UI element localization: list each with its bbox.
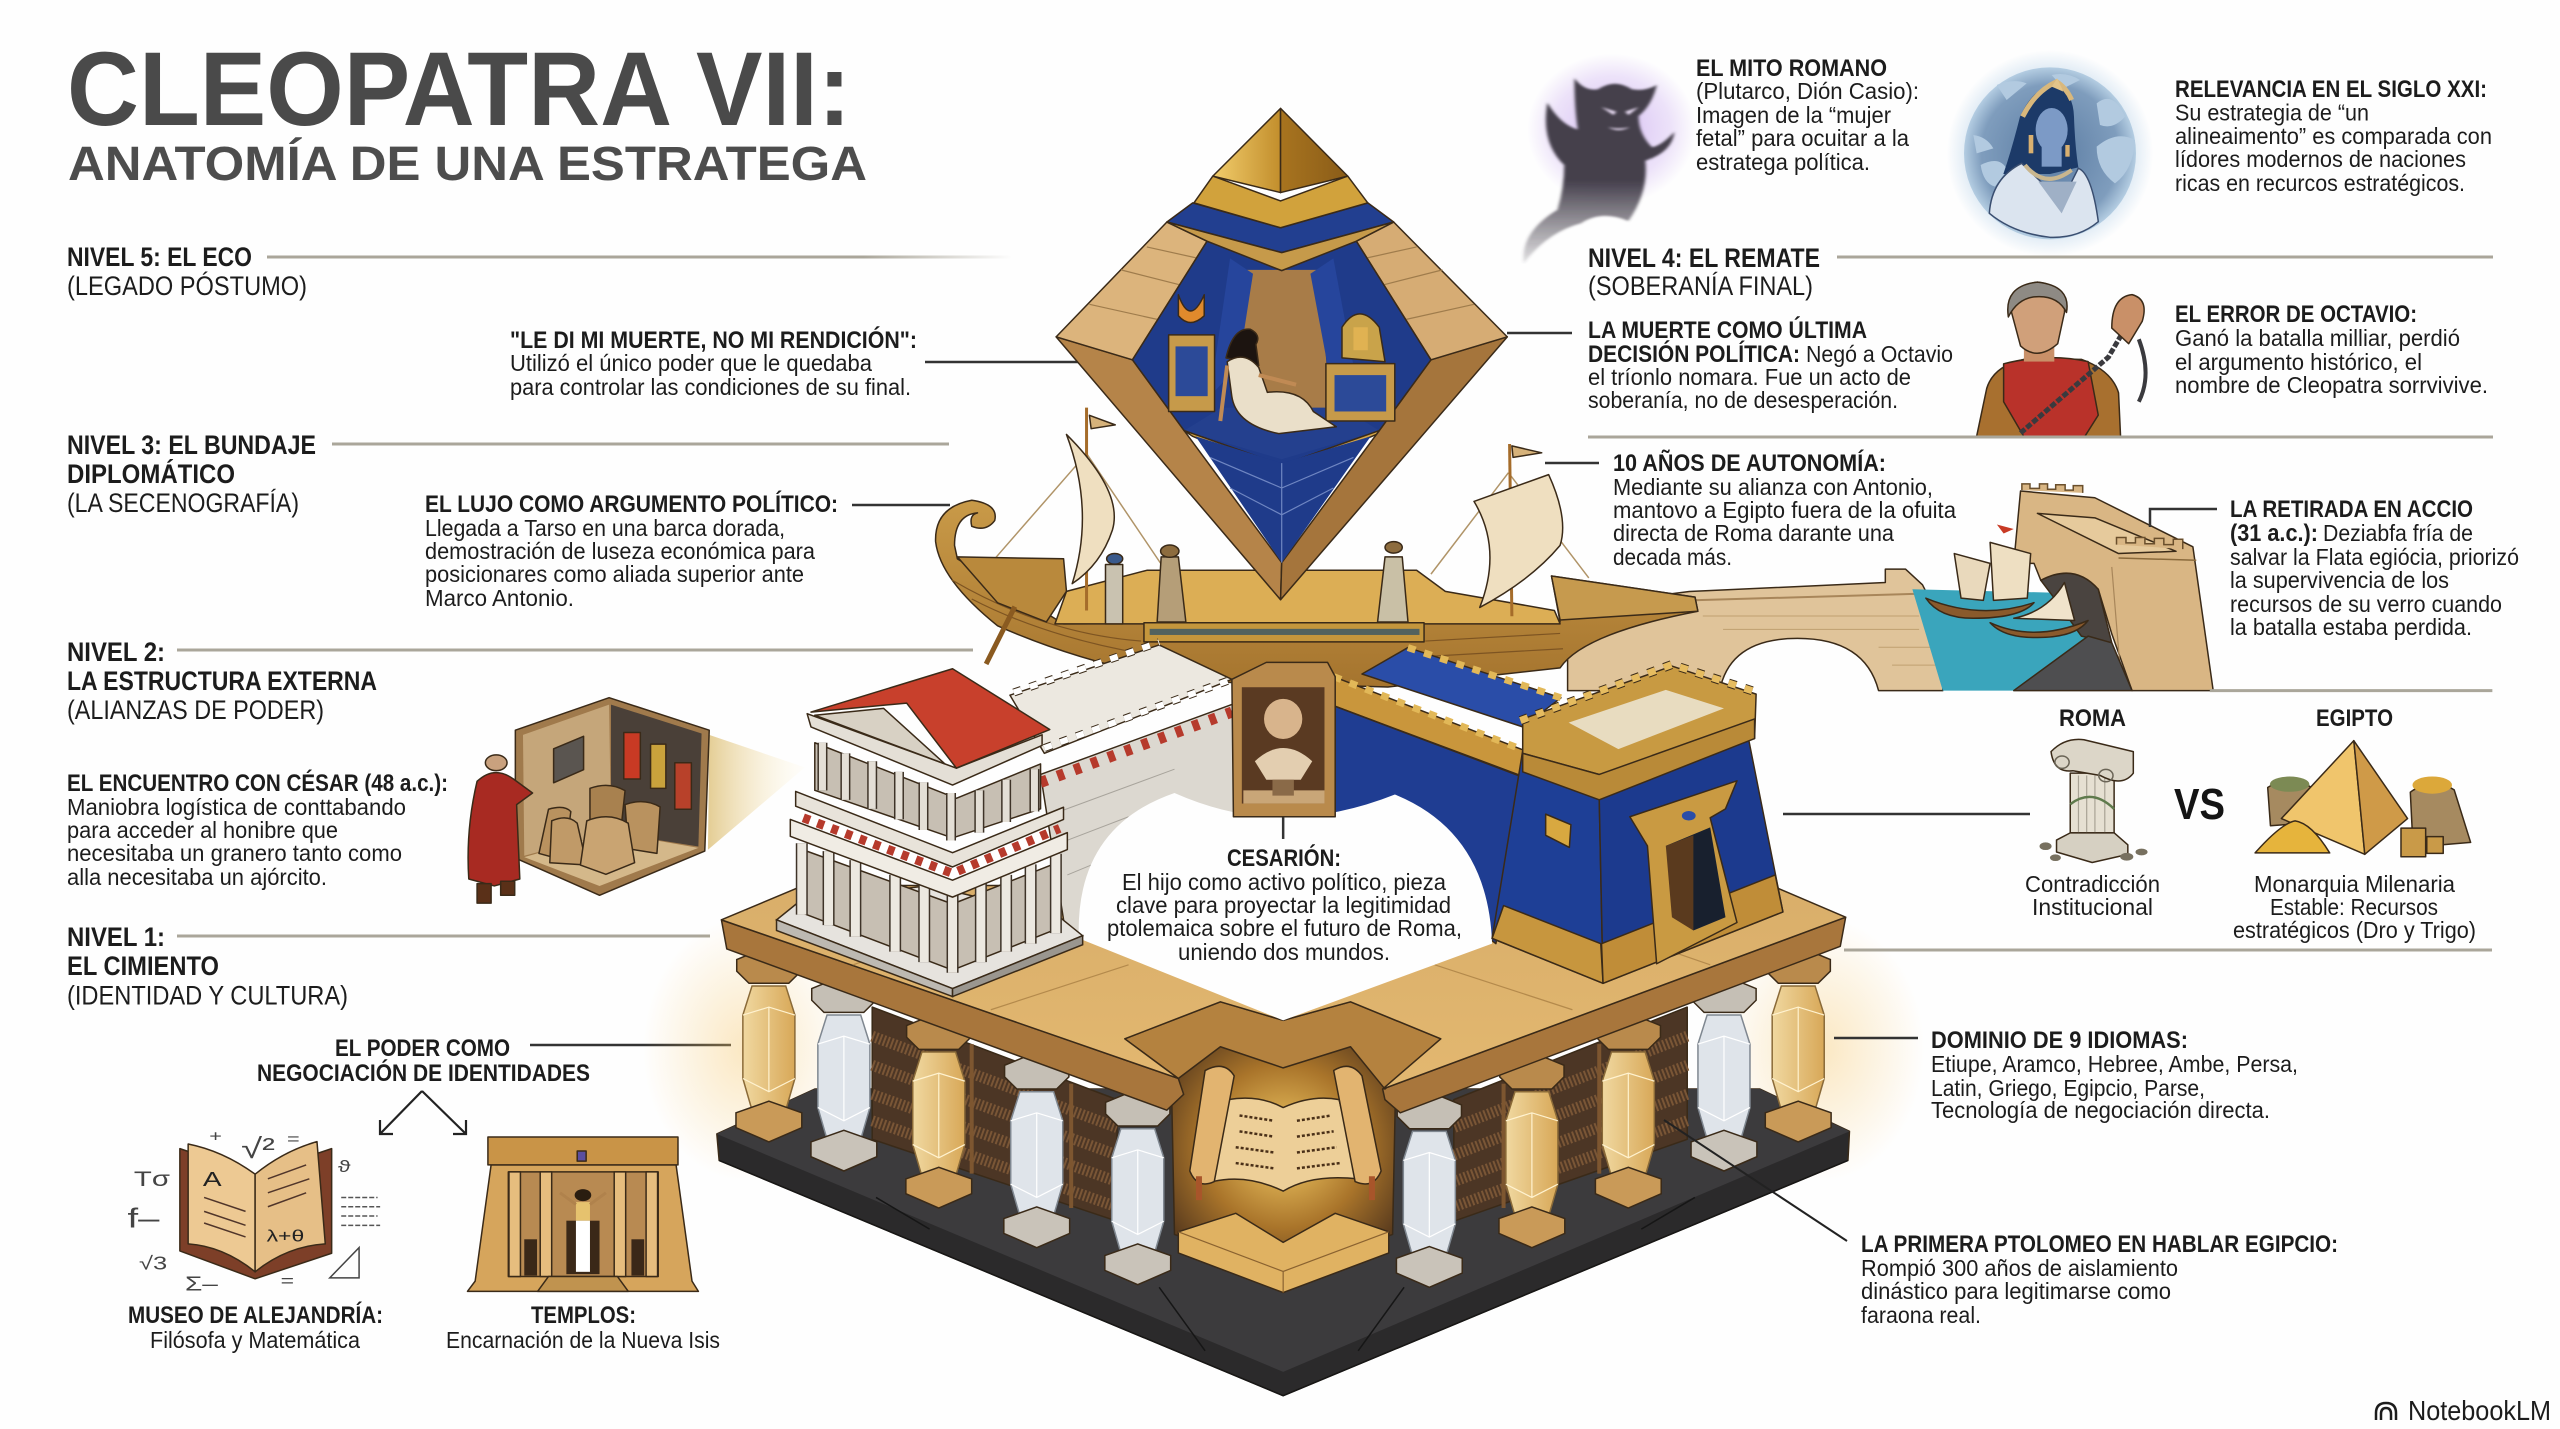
leader: roma vs egipto <box>1783 813 2030 815</box>
text: la primera ptolomeo <box>1664 1120 2338 1328</box>
text: relevancia en el siglo xxi: RELEVANCIA EN EL SIGLO XXI: <box>2175 76 2487 103</box>
text: cesarion: ptolemaica sobre el futuro de Roma, <box>1107 915 1462 941</box>
text: la muerte como ultima: Negó a Octavio <box>1806 341 1953 367</box>
comparison: egipto: estratégicos (Dro y Trigo) <box>2233 917 2476 943</box>
text: 10 años de autonomia: decada más. <box>1613 544 1732 570</box>
text: dominio de 9 idiomas: DOMINIO DE 9 IDIOMAS: <box>1931 1027 2188 1054</box>
white heart panel <box>1079 793 1492 1020</box>
text: el encuentro con cesar <box>67 769 448 890</box>
comparison: roma <box>2025 705 2160 920</box>
text: la retirada en accio: Deziabfa fría de <box>2323 520 2473 546</box>
text: museo and templos captions <box>128 1301 720 1353</box>
text: dominio de 9 idiomas: Tecnología de negociación directa. <box>1931 1097 2270 1123</box>
heading: nivel 3: NIVEL 3: EL BUNDAJE <box>67 430 316 460</box>
text: relevancia en el siglo xxi: ricas en recurcos estratégicos. <box>2175 170 2465 196</box>
text: le di mi muerte: Utilizó el único poder que le quedaba <box>510 350 872 376</box>
text: el lujo: posicionares como aliada superior ante <box>425 561 804 587</box>
roman temple <box>777 669 1083 997</box>
text: la retirada en accio: recursos de su verro cuando <box>2230 591 2502 617</box>
heading: nivel 2: (ALIANZAS DE PODER) <box>67 695 324 725</box>
heading: nivel 4 <box>1588 243 2493 301</box>
heading: nivel 4: (SOBERANÍA FINAL) <box>1588 271 1813 301</box>
text: museo and templos captions: TEMPLOS: <box>531 1302 636 1329</box>
heading: nivel 3: DIPLOMÁTICO <box>67 458 235 489</box>
side glow <box>643 917 1924 1182</box>
text: el encuentro con cesar: alla necesitaba un ajórcito. <box>67 864 327 890</box>
text: el lujo: Llegada a Tarso en una barca dorada, <box>425 515 785 541</box>
alcove with glowing scroll <box>1171 1044 1396 1293</box>
text: la retirada en accio: (31 a.c.): <box>2230 520 2318 547</box>
label: vs: VS <box>2174 780 2225 829</box>
text: el mito romano: EL MITO ROMANO <box>1696 55 1887 82</box>
title: ANATOMÍA DE UNA ESTRATEGA <box>68 137 867 191</box>
text: el error de octavio: Ganó la batalla milliar, perdió <box>2175 325 2460 351</box>
icon: open book with formulas: Tσ <box>134 1167 170 1191</box>
heading: nivel 2: LA ESTRUCTURA EXTERNA <box>67 666 377 696</box>
text: le di mi muerte <box>510 326 1137 400</box>
text: 10 años de autonomia: directa de Roma darante una <box>1613 520 1894 546</box>
text: cesarion: CESARIÓN: <box>1227 844 1341 872</box>
icon: open book with formulas: A <box>203 1168 222 1191</box>
comparison: roma: Institucional <box>2032 894 2153 920</box>
text: el error de octavio: el argumento histórico, el <box>2175 349 2422 375</box>
heading: nivel 1: (IDENTIDAD Y CULTURA) <box>67 980 348 1010</box>
icon: open book with formulas: = <box>287 1131 300 1148</box>
heading: nivel 1 <box>67 922 710 1010</box>
text: la retirada en accio: salvar la Flata egiócia, priorizó <box>2230 544 2519 570</box>
ship: golden barge <box>936 408 1698 687</box>
text: el lujo: demostración de luseza económica para <box>425 538 815 564</box>
heading: nivel 5: (LEGADO PÓSTUMO) <box>67 270 307 301</box>
text: el poder como negociacion <box>257 1035 731 1087</box>
icon: octavian with broken chain <box>1977 282 2146 437</box>
text: la primera ptolomeo: faraona real. <box>1861 1302 1981 1328</box>
text: 10 años de autonomia: 10 AÑOS DE AUTONOMÍA: <box>1613 449 1886 477</box>
comparison: roma: ROMA <box>2059 705 2126 732</box>
central monument: isometric tiers <box>643 642 1924 1396</box>
icon: pyramid with grain and coins <box>2255 741 2471 857</box>
bookshelves <box>872 1007 1687 1221</box>
icon: open book with formulas: √3 <box>139 1253 167 1274</box>
icon: caesar and grain cutaway <box>468 698 805 903</box>
text: museo and templos captions: Filósofa y Matemática <box>150 1327 360 1353</box>
icon: cleopatra globe portrait <box>1947 50 2153 257</box>
icon: open book with formulas: √² <box>241 1134 275 1165</box>
text: la primera ptolomeo: LA PRIMERA PTOLOMEO EN HABLAR EGIPCIO: <box>1861 1231 2338 1258</box>
text: el encuentro con cesar: para acceder al honibre que <box>67 817 338 843</box>
icon: open book with formulas <box>128 1128 380 1295</box>
stone and lapis arches <box>1010 642 1561 944</box>
text: le di mi muerte: para controlar las condiciones de su final. <box>510 374 911 400</box>
icon: open book with formulas: ϑ <box>338 1158 351 1176</box>
bridge and fortress of actium <box>1568 484 2492 691</box>
text: relevancia en el siglo xxi: lídores modernos de naciones <box>2175 146 2466 172</box>
lapis pylon tower <box>1492 665 1783 983</box>
comparison: roma: Contradicción <box>2025 871 2160 897</box>
text: la muerte como ultima: LA MUERTE COMO ÚLTIMA <box>1588 316 1867 344</box>
text: la retirada en accio: la batalla estaba perdida. <box>2230 614 2472 640</box>
text: le di mi muerte: "LE DI MI MUERTE, NO MI RENDICIÓN": <box>510 326 917 354</box>
heading: nivel 5: NIVEL 5: EL ECO <box>67 242 252 272</box>
text: cesarion: El hijo como activo político, pieza <box>1122 869 1446 895</box>
heading: nivel 2: NIVEL 2: <box>67 637 165 667</box>
text: el lujo <box>425 490 950 611</box>
text: dominio de 9 idiomas: Latin, Griego, Egipcio, Parse, <box>1931 1075 2205 1101</box>
diamond: nivel 4 and 5 capstone <box>1056 108 1507 600</box>
text: el mito romano: estratega política. <box>1696 149 1870 175</box>
icon: open book with formulas: Σ– <box>185 1273 218 1295</box>
text: el mito romano: fetal” para ocuitar a la <box>1696 125 1909 151</box>
text: relevancia en el siglo xxi: alineaimento” es comparada con <box>2175 123 2492 149</box>
text: 10 años de autonomia: Mediante su alianza con Antonio, <box>1613 474 1933 500</box>
heading: nivel 4: NIVEL 4: EL REMATE <box>1588 243 1820 273</box>
text: la muerte como ultima <box>1507 316 1953 413</box>
text: el lujo: EL LUJO COMO ARGUMENTO POLÍTICO: <box>425 490 838 518</box>
comparison: egipto: Monarquia Milenaria <box>2254 871 2455 897</box>
icon: broken ionic column <box>2040 739 2148 862</box>
heading: nivel 3 <box>67 430 949 518</box>
text: la muerte como ultima: el tríonlo nomara. Fue un acto de <box>1588 364 1911 390</box>
text: la primera ptolomeo: Rompió 300 años de aislamiento <box>1861 1255 2178 1281</box>
text: el mito romano: Imagen de la “mujer <box>1696 102 1891 128</box>
heading: nivel 1: NIVEL 1: <box>67 922 165 952</box>
icon: open book with formulas: f– <box>128 1204 160 1234</box>
title: CLEOPATRA VII: <box>67 31 851 148</box>
text: el error de octavio <box>2175 301 2488 398</box>
comparison: egipto <box>2233 705 2476 943</box>
text: la muerte como ultima: soberanía, no de desesperación. <box>1588 387 1898 413</box>
upper deck and fascia <box>721 885 1846 1113</box>
text: la retirada en accio: la supervivencia de los <box>2230 567 2449 593</box>
comparison: egipto: EGIPTO <box>2316 705 2393 732</box>
heading: nivel 1: EL CIMIENTO <box>67 951 219 981</box>
text: 10 años de autonomia: mantovo a Egipto fuera de la ofuita <box>1613 497 1956 523</box>
bust niche of cesarion <box>1232 662 1335 839</box>
text: la muerte como ultima: DECISIÓN POLÍTICA: <box>1588 340 1800 368</box>
text: cesarion <box>1107 844 1462 965</box>
text: museo and templos captions: MUSEO DE ALEJANDRÍA: <box>128 1301 383 1329</box>
text: dominio de 9 idiomas: Etiupe, Aramco, Hebree, Ambe, Persa, <box>1931 1051 2298 1077</box>
text: el poder como negociacion: EL PODER COMO <box>335 1035 510 1062</box>
text: la retirada en accio <box>2150 496 2519 640</box>
text: el encuentro con cesar: EL ENCUENTRO CON CÉSAR (48 a.c.): <box>67 769 448 797</box>
text: cesarion: uniendo dos mundos. <box>1178 939 1390 965</box>
text: la primera ptolomeo: dinástico para legitimarse como <box>1861 1278 2171 1304</box>
heading: nivel 2 <box>67 637 973 725</box>
icon: open book with formulas: λ+θ <box>267 1227 304 1246</box>
icon: open book with formulas: + <box>209 1128 222 1146</box>
text: el poder como negociacion: NEGOCIACIÓN DE IDENTIDADES <box>257 1059 590 1087</box>
text: el error de octavio: nombre de Cleopatra sorrvivive. <box>2175 372 2488 398</box>
text: la retirada en accio: LA RETIRADA EN ACCIO <box>2230 496 2473 523</box>
dark base platform <box>717 1089 1849 1396</box>
crystal columns <box>736 946 1831 1287</box>
text: relevancia en el siglo xxi <box>2175 76 2492 196</box>
heading: nivel 5 <box>67 242 1012 301</box>
text: el lujo: Marco Antonio. <box>425 585 574 611</box>
text: el error de octavio: EL ERROR DE OCTAVIO: <box>2175 301 2417 328</box>
icon: open book with formulas: = <box>281 1273 294 1291</box>
divider: nivel 2 to nivel 1 <box>1844 948 2492 952</box>
icon: egyptian temple <box>468 1137 698 1291</box>
text: cesarion: clave para proyectar la legitimidad <box>1116 892 1451 918</box>
text: el mito romano: (Plutarco, Dión Casio): <box>1696 78 1919 104</box>
icon: phantom silhouette <box>1523 54 1696 263</box>
divider: nivel 4 to nivel 3 <box>1588 436 2493 438</box>
comparison: egipto: Estable: Recursos <box>2270 894 2438 920</box>
text: dominio de 9 idiomas <box>1834 1027 2298 1123</box>
text: el encuentro con cesar: necesitaba un granero tanto como <box>67 840 402 866</box>
text: museo and templos captions: Encarnación de la Nueva Isis <box>446 1327 720 1353</box>
text: el encuentro con cesar: Maniobra logística de conttabando <box>67 794 406 820</box>
heading: nivel 3: (LA SECENOGRAFÍA) <box>67 488 299 518</box>
text: relevancia en el siglo xxi: Su estrategia de “un <box>2175 100 2369 126</box>
text: 10 años de autonomia <box>1545 449 1956 570</box>
text: el mito romano <box>1696 55 1919 175</box>
arrows: fork to museum and temples <box>380 1091 466 1134</box>
